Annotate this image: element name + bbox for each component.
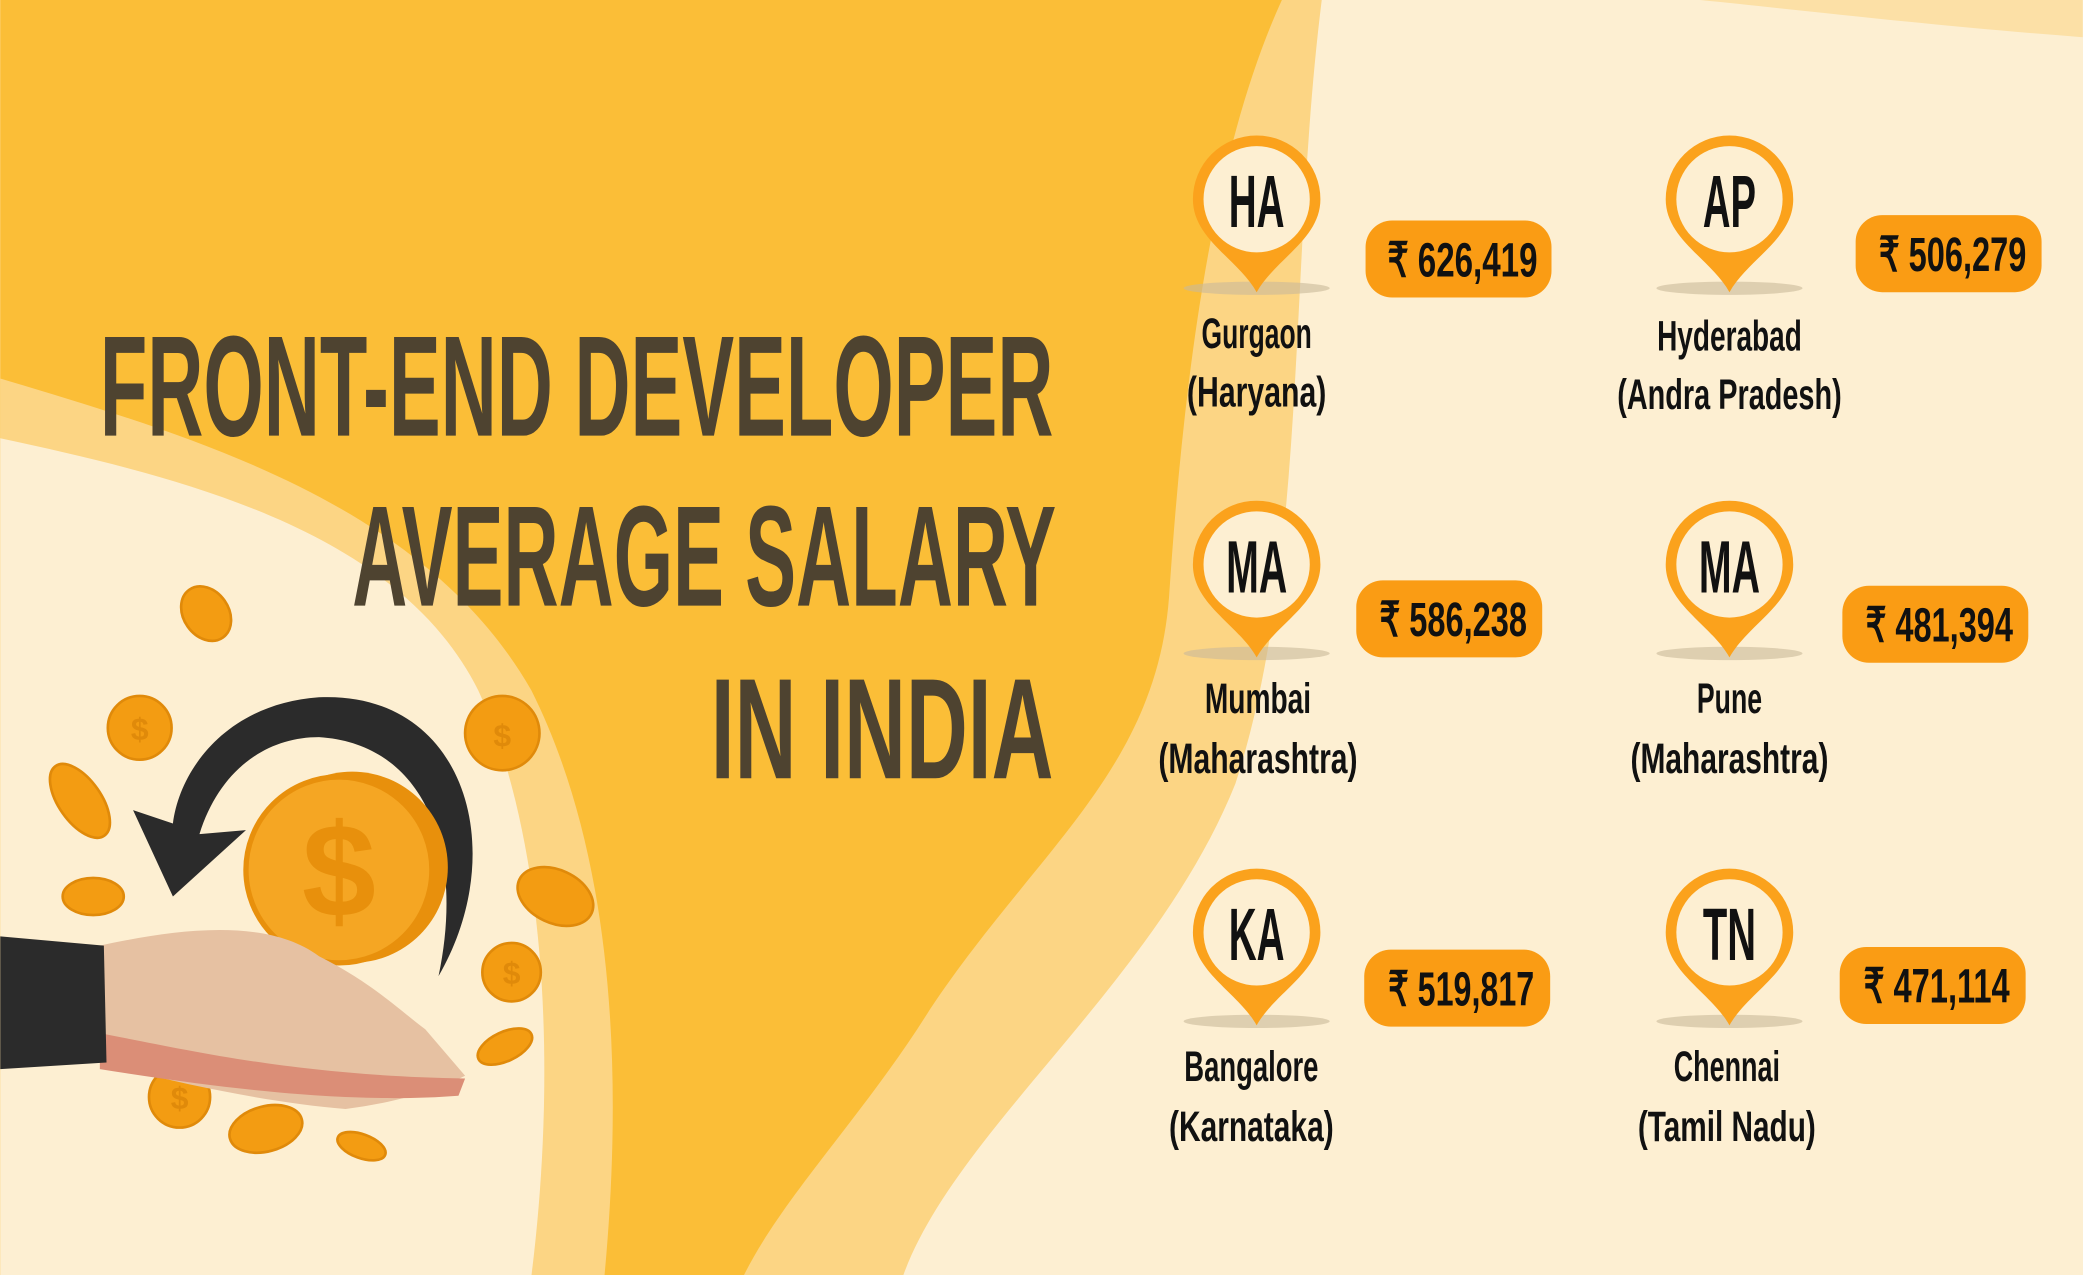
city labels: (Haryana)	[1187, 369, 1326, 416]
city labels: (Andra Pradesh)	[1617, 372, 1842, 419]
city labels: (Tamil Nadu)	[1638, 1104, 1816, 1151]
pin: MA Pune	[1656, 501, 1803, 660]
city labels: (Maharashtra)	[1158, 736, 1358, 783]
illustration: hand with coins: $	[171, 1080, 189, 1116]
salary badges	[1356, 215, 2042, 1027]
title: AVERAGE SALARY	[352, 477, 1056, 637]
pin: HA: HA	[1229, 160, 1285, 243]
pin: TN	[1656, 869, 1803, 1028]
city labels: Hyderabad	[1657, 314, 1802, 361]
title: FRONT-END DEVELOPER	[100, 307, 1053, 467]
small coins	[38, 577, 603, 1166]
title: IN INDIA	[711, 649, 1053, 809]
big coin	[257, 772, 448, 963]
illustration: hand with coins: $	[302, 797, 376, 945]
pin: MA Mumbai: MA	[1226, 525, 1287, 608]
illustration: hand with coins: $	[493, 717, 511, 753]
pin: KA: KA	[1229, 893, 1285, 976]
city labels: Pune	[1697, 676, 1762, 723]
salary badges: ₹ 471,114	[1864, 961, 2010, 1014]
salary badges: ₹ 481,394	[1866, 599, 2013, 652]
city labels: Gurgaon	[1202, 311, 1312, 358]
illustration: hand with coins: $	[503, 955, 521, 991]
salary badges: ₹ 586,238	[1380, 594, 1527, 647]
pin: AP	[1656, 135, 1803, 295]
pin: MA Pune: MA	[1699, 525, 1760, 608]
city labels: Mumbai	[1205, 676, 1311, 723]
city labels	[1158, 311, 1842, 1151]
illustration: hand with coins	[0, 577, 603, 1166]
city labels: Chennai	[1674, 1044, 1780, 1091]
pin: AP: AP	[1703, 160, 1756, 243]
hand	[100, 930, 465, 1109]
pin: HA	[1184, 135, 1330, 295]
arrow	[133, 697, 473, 976]
city labels: Bangalore	[1184, 1044, 1318, 1091]
title	[100, 307, 1056, 809]
salary badges: ₹ 519,817	[1388, 963, 1534, 1016]
salary badges: ₹ 626,419	[1387, 234, 1538, 287]
city labels: (Maharashtra)	[1631, 736, 1828, 783]
city labels: (Karnataka)	[1169, 1104, 1334, 1151]
pin: KA	[1184, 869, 1330, 1028]
pin: MA Mumbai	[1184, 501, 1330, 660]
pin: TN: TN	[1703, 893, 1756, 976]
pins	[1184, 135, 1803, 1028]
illustration: hand with coins: $	[131, 711, 149, 747]
